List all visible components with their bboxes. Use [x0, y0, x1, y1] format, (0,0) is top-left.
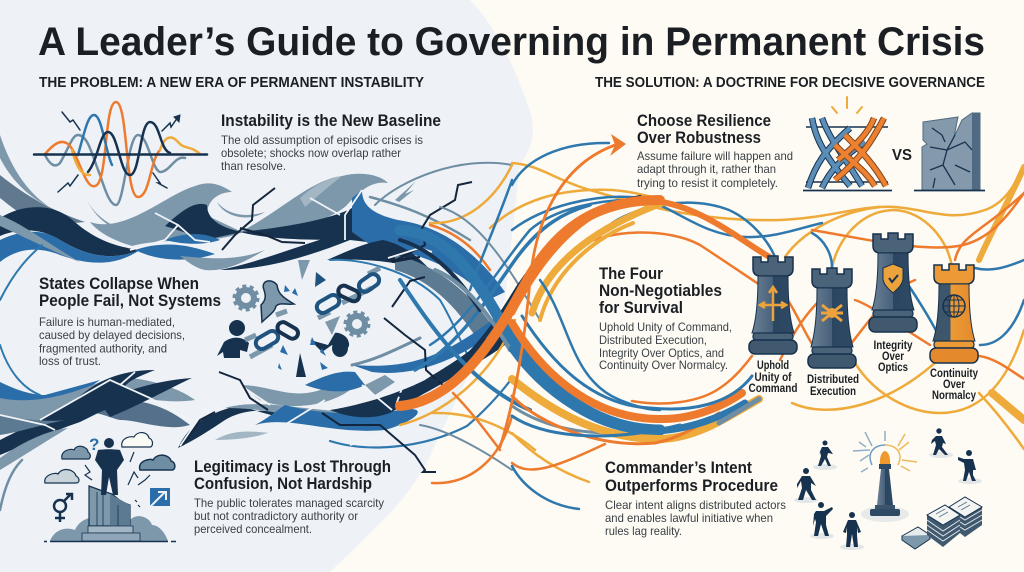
text block: resilience	[637, 112, 793, 190]
tower labels: Command	[748, 383, 798, 395]
text block: legitimacy	[194, 458, 391, 536]
text block: four non-negotiables: Distributed Execution,	[599, 333, 707, 347]
text block: states collapse: Failure is human-mediated,	[39, 315, 175, 329]
strands: flowing doctrine threads	[400, 134, 1024, 509]
crossing bands lower-left to upper-right	[400, 197, 662, 395]
text block: resilience: trying to resist it completely.	[637, 176, 778, 190]
text block: commander's intent: and enables lawful initiative when	[605, 511, 773, 525]
icons: distributed actors	[794, 428, 982, 550]
text block: states collapse: fragmented authority, and	[39, 342, 167, 356]
wave band: upper turbulence	[0, 135, 512, 360]
actor 2	[794, 468, 818, 503]
actor 3	[810, 502, 834, 539]
arrowhead: orange strand	[610, 134, 626, 156]
text block: legitimacy: perceived concealment.	[194, 522, 312, 536]
tower labels	[748, 340, 979, 402]
actor 5	[929, 428, 953, 458]
text block: legitimacy: Legitimacy is Lost Through	[194, 458, 391, 476]
icon: woven resilient knot	[803, 97, 892, 190]
text block: instability baseline	[221, 112, 441, 173]
text block: four non-negotiables: Integrity Over Optics, and	[599, 346, 724, 360]
text block: instability baseline: than resolve.	[221, 159, 286, 173]
thin upper and right threads	[400, 143, 1024, 509]
tower labels: Over	[943, 379, 965, 391]
tower: continuity	[930, 264, 978, 363]
icon: figure on crumbling ruin	[44, 433, 176, 542]
text block: resilience: adapt through it, rather than	[637, 162, 776, 176]
actor 1	[813, 440, 837, 470]
icon: volatile wave chart	[34, 102, 207, 205]
text block: states collapse	[39, 275, 221, 368]
text block: legitimacy: The public tolerates managed scarcity	[194, 496, 384, 510]
text block: four non-negotiables: Continuity Over Normalcy.	[599, 358, 728, 372]
text: versus: VS	[892, 147, 912, 164]
text block: instability baseline: Instability is the New Baseline	[221, 112, 441, 130]
tower labels: Integrity	[874, 340, 913, 352]
tower labels: Over	[882, 351, 904, 363]
icon: broken chain between people	[217, 260, 381, 377]
wave cracks	[130, 182, 472, 307]
background: pale blue problem side	[0, 0, 533, 572]
emblem: compass arrows	[760, 287, 786, 321]
text block: states collapse: loss of trust.	[39, 354, 101, 368]
icon: beacon lighthouse	[853, 431, 917, 522]
crossing bands upper-left to lower-right	[400, 230, 759, 444]
text block: states collapse: caused by delayed decisions,	[39, 328, 185, 342]
tower labels: Optics	[878, 362, 908, 374]
tower labels: Execution	[810, 386, 856, 398]
icon: stacks of rules paperwork	[902, 497, 982, 549]
text block: commander's intent: Clear intent aligns distributed actors	[605, 498, 786, 512]
text block: four non-negotiables: for Survival	[599, 299, 683, 317]
tower labels: Normalcy	[932, 390, 976, 402]
tower labels: Unity of	[754, 372, 792, 384]
tower labels: Distributed	[807, 374, 859, 386]
text block: commander's intent: Outperforms Procedure	[605, 477, 778, 495]
dominant orange sweep	[400, 144, 775, 447]
icon: figure on crumbling ruin: ?	[89, 435, 99, 454]
title: A Leader’s Guide to Governing in Permanent Crisis	[38, 20, 985, 64]
text block: resilience: Choose Resilience	[637, 112, 771, 130]
text block: commander's intent	[605, 459, 786, 538]
text block: legitimacy: Confusion, Not Hardship	[194, 475, 372, 493]
section heading: the problem: THE PROBLEM: A NEW ERA OF PERMANENT INSTABILITY	[39, 75, 424, 91]
tower: distributed execution	[808, 268, 856, 368]
text block: commander's intent: Commander’s Intent	[605, 459, 752, 477]
lower wave cracks	[0, 318, 446, 472]
emblem: globe	[943, 295, 965, 317]
wave band: lower turbulence	[0, 305, 512, 510]
actor 6	[958, 450, 982, 484]
icon: cracked wall	[914, 113, 985, 190]
text block: resilience: Assume failure will happen and	[637, 149, 793, 163]
tower labels: Continuity	[930, 368, 979, 380]
text block: four non-negotiables: Uphold Unity of Command,	[599, 320, 732, 334]
tower: integrity	[869, 233, 917, 332]
emblem: shield check	[883, 264, 903, 293]
text block: four non-negotiables	[599, 265, 732, 372]
text block: instability baseline: The old assumption of episodic crises is	[221, 133, 423, 147]
actor 4	[840, 512, 864, 550]
tower labels: Uphold	[757, 360, 789, 372]
text block: resilience: Over Robustness	[637, 129, 761, 147]
emblem: network node	[821, 305, 843, 321]
text block: commander's intent: rules lag reality.	[605, 524, 682, 538]
text block: legitimacy: but not contradictory authority or	[194, 509, 358, 523]
tower: unity of command	[749, 256, 797, 354]
text block: states collapse: People Fail, Not Systems	[39, 292, 221, 310]
text block: instability baseline: obsolete; shocks now overlap rather	[221, 146, 401, 160]
text block: states collapse: States Collapse When	[39, 275, 199, 293]
section heading: the solution: THE SOLUTION: A DOCTRINE FOR DECISIVE GOVERNANCE	[595, 75, 985, 91]
text block: four non-negotiables: Non-Negotiables	[599, 282, 722, 300]
text block: four non-negotiables: The Four	[599, 265, 664, 283]
